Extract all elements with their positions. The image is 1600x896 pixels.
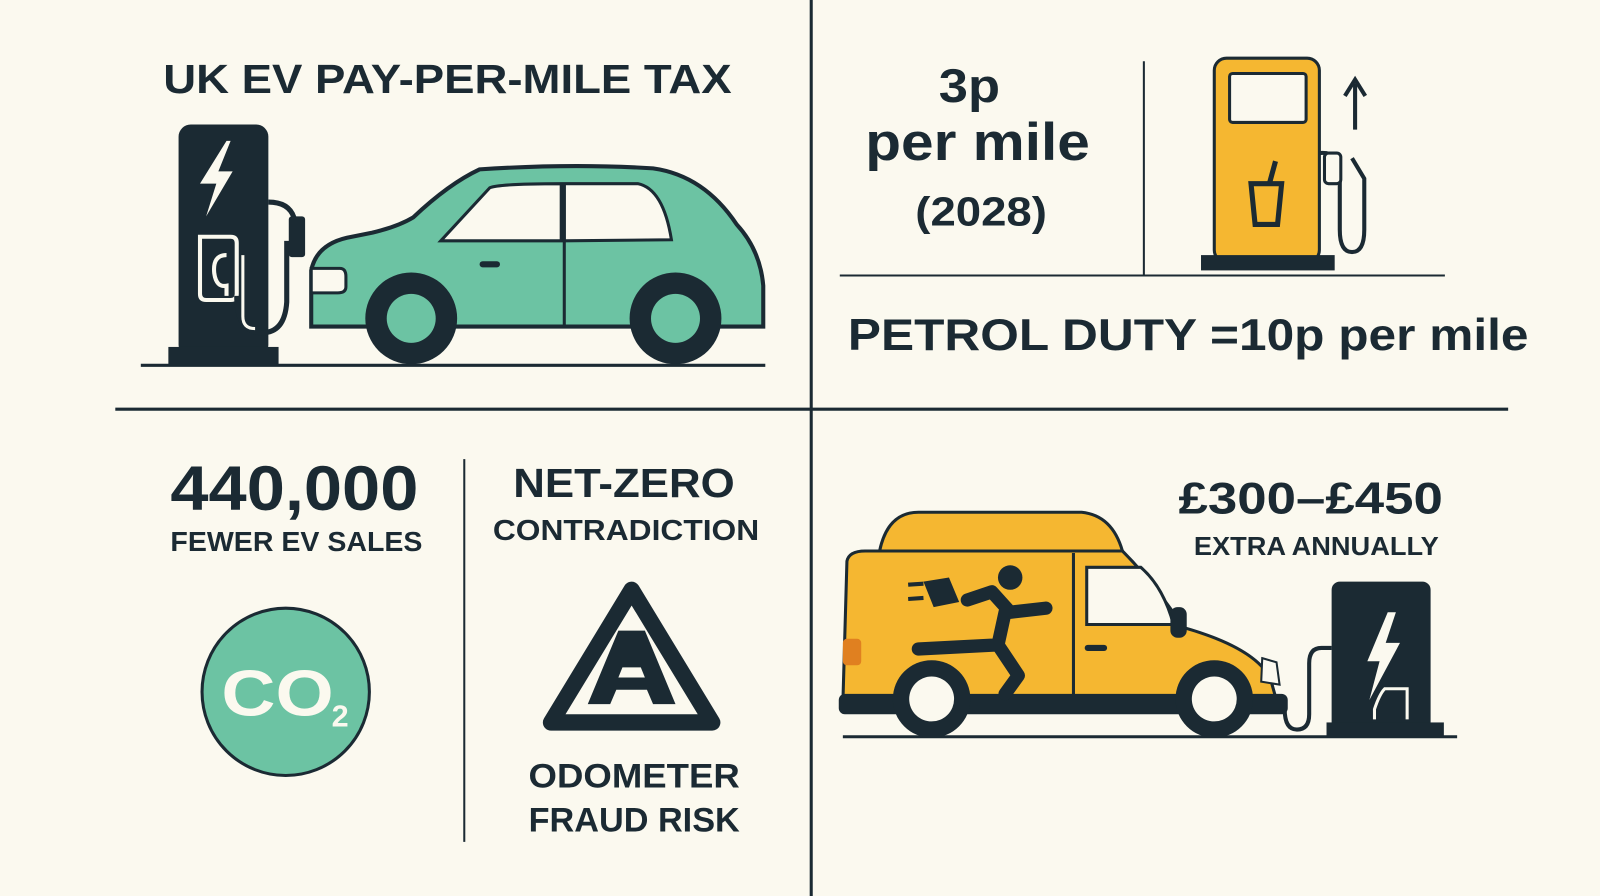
icon: EV charger with car xyxy=(141,124,765,365)
stat: £300–£450 extra annually xyxy=(1179,472,1443,561)
icon: CO2 circle: 2 xyxy=(332,700,349,734)
text: 3p per mile (2028): per mile xyxy=(865,113,1090,172)
stat: £300–£450 extra annually: EXTRA ANNUALLY xyxy=(1194,533,1439,561)
heading: net-zero contradiction xyxy=(493,460,759,547)
icon: running figure with plug xyxy=(908,565,1046,694)
icon: CO2 circle xyxy=(202,608,369,776)
stat: £300–£450 extra annually: £300–£450 xyxy=(1179,472,1443,523)
heading: net-zero contradiction: NET-ZERO xyxy=(513,460,735,506)
icon: CO2 circle: CO xyxy=(221,656,334,729)
stat: 440,000 fewer EV sales xyxy=(170,454,422,557)
icon: fuel pump with up arrow xyxy=(1201,58,1365,270)
text: odometer fraud risk: ODOMETER xyxy=(529,758,740,796)
title: UK EV PAY-PER-MILE TAX xyxy=(163,56,732,102)
text: odometer fraud risk xyxy=(529,758,740,840)
stat: 440,000 fewer EV sales: FEWER EV SALES xyxy=(170,526,422,557)
text: petrol duty: PETROL DUTY =10p per mile xyxy=(848,309,1529,360)
text: 3p per mile (2028): 3p xyxy=(939,60,1000,112)
text: odometer fraud risk: FRAUD RISK xyxy=(529,802,740,840)
text: 3p per mile (2028) xyxy=(865,60,1090,235)
stat: 440,000 fewer EV sales: 440,000 xyxy=(170,454,418,524)
text: 3p per mile (2028): (2028) xyxy=(915,189,1047,235)
icon: van with charger xyxy=(839,512,1457,738)
heading: net-zero contradiction: CONTRADICTION xyxy=(493,515,759,547)
icon: warning triangle xyxy=(551,590,712,722)
